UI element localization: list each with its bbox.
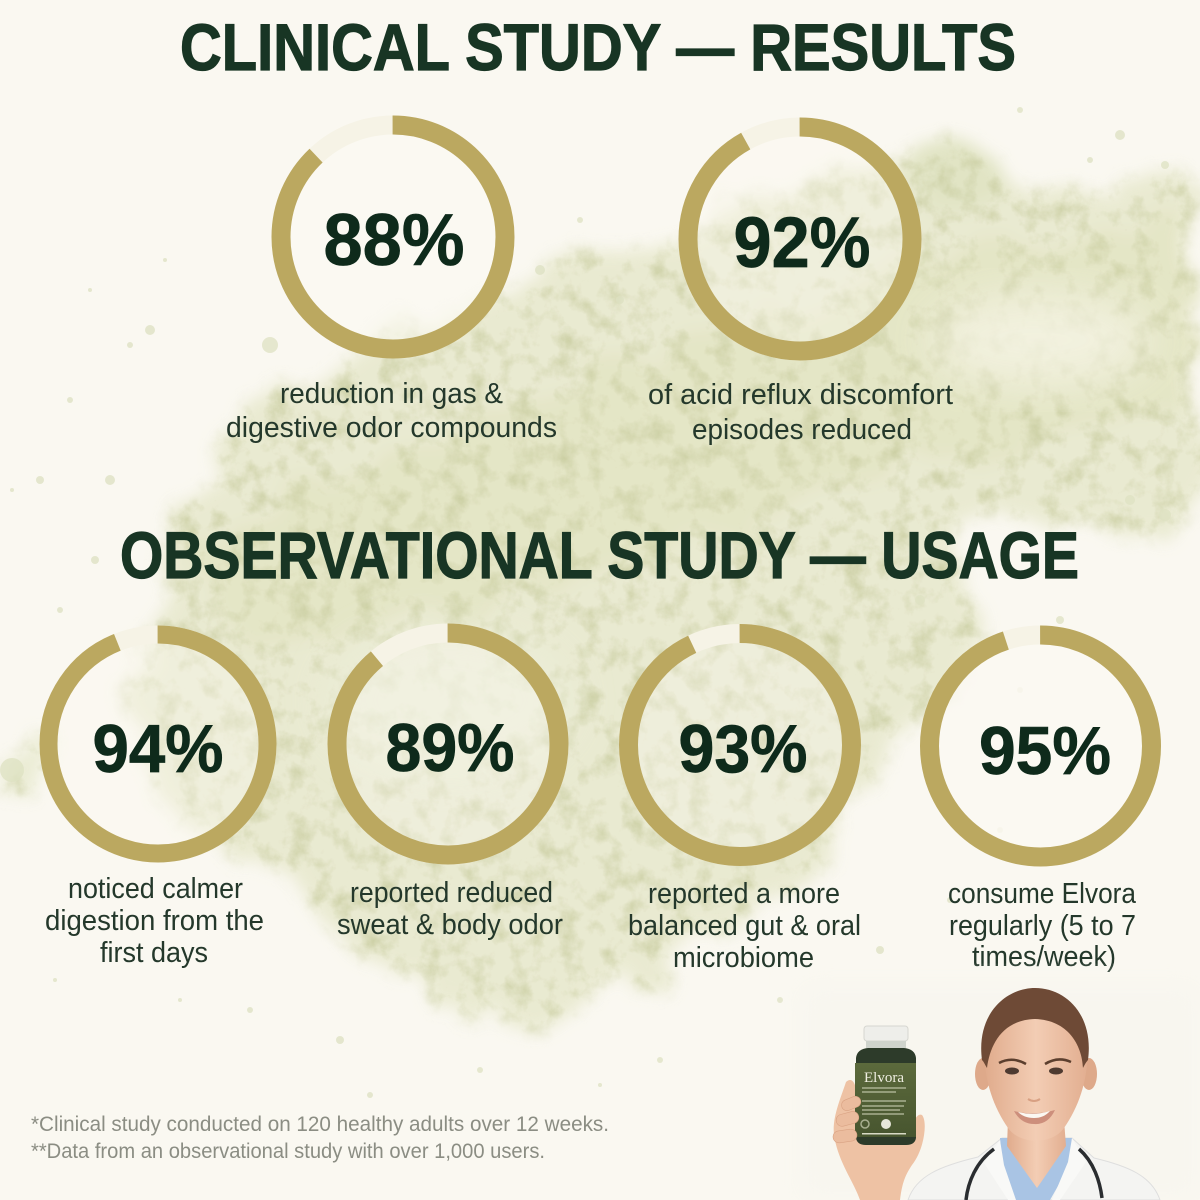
stat ring: 95%: 95% bbox=[979, 713, 1111, 789]
title: clinical study: CLINICAL STUDY — RESULTS bbox=[180, 10, 1016, 84]
label: 95%: consume Elvora bbox=[948, 878, 1137, 910]
stat ring: 92% bbox=[688, 127, 912, 351]
footnotes: **Data from an observational study with over 1,000 users. bbox=[31, 1140, 545, 1163]
label: 88%: digestive odor compounds bbox=[226, 412, 557, 444]
footnotes bbox=[31, 1113, 609, 1163]
stat ring: 93% bbox=[628, 634, 852, 856]
label: 89%: sweat & body odor bbox=[337, 909, 563, 941]
doctor figure bbox=[908, 988, 1160, 1200]
label: 88% bbox=[226, 378, 557, 444]
stat ring: 88%: 88% bbox=[324, 200, 464, 281]
label: 94% bbox=[45, 873, 264, 969]
label: 95%: times/week) bbox=[972, 941, 1116, 973]
stat ring: 88% bbox=[281, 125, 505, 349]
stat ring: 94% bbox=[48, 634, 268, 854]
hand bbox=[834, 1080, 925, 1200]
product bottle: Elvora bbox=[864, 1070, 904, 1086]
label: 92%: of acid reflux discomfort bbox=[648, 379, 953, 411]
label: 95%: regularly (5 to 7 bbox=[949, 910, 1136, 942]
label: 94%: first days bbox=[100, 937, 208, 969]
label: 89% bbox=[337, 877, 563, 941]
label: 93%: microbiome bbox=[673, 942, 814, 974]
footnotes: *Clinical study conducted on 120 healthy adults over 12 weeks. bbox=[31, 1113, 609, 1136]
product bottle bbox=[855, 1026, 916, 1145]
fingers bbox=[832, 1095, 863, 1144]
label: 88%: reduction in gas & bbox=[280, 378, 503, 410]
label: 94%: noticed calmer bbox=[68, 873, 243, 905]
label: 92% bbox=[648, 379, 953, 446]
label: 92%: episodes reduced bbox=[692, 414, 912, 446]
label: 93%: reported a more bbox=[648, 878, 840, 910]
label: 94%: digestion from the bbox=[45, 905, 264, 937]
label: 93% bbox=[628, 878, 861, 974]
label: 93%: balanced gut & oral bbox=[628, 910, 861, 942]
doctor holding product bbox=[800, 985, 1200, 1200]
stat ring: 92%: 92% bbox=[734, 204, 870, 283]
label: 95% bbox=[948, 878, 1137, 973]
label: 89%: reported reduced bbox=[350, 877, 553, 909]
stat ring: 89% bbox=[337, 633, 559, 855]
stat ring: 95% bbox=[930, 635, 1152, 857]
stat ring: 94%: 94% bbox=[92, 711, 224, 787]
stat ring: 89%: 89% bbox=[386, 710, 514, 786]
stat ring: 93%: 93% bbox=[678, 711, 808, 787]
